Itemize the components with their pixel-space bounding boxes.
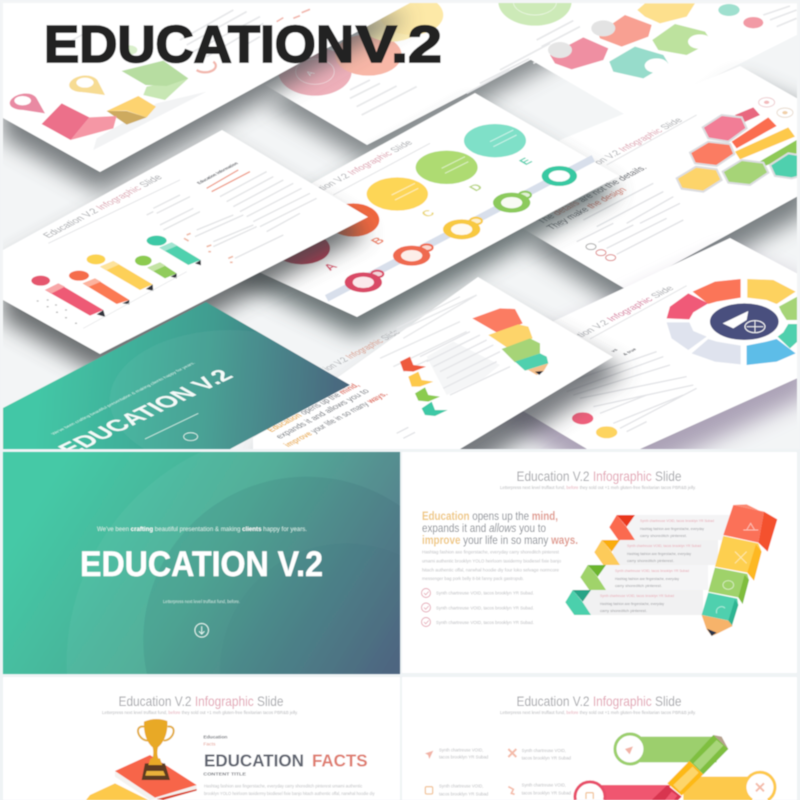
book: yellow	[86, 783, 148, 800]
slide subtitle: Letterpress next level truffaut fund, before they sold out +1 meh gluten-free flexitarian tacos PBR&B jelly.	[102, 710, 298, 715]
heading	[422, 509, 578, 547]
pencil: segments	[472, 308, 548, 375]
panel: education facts slide	[3, 677, 400, 800]
ring B	[393, 244, 433, 266]
slide: pencil ribbons: expands it and allows you to	[273, 387, 372, 440]
content text: Hashtag fashion axe fingerstache, everyday carry shoreditch pinterest umami authentic	[204, 784, 363, 789]
slide: pencil bar chart	[3, 130, 368, 374]
slide: timeline	[200, 93, 619, 337]
ribbon rows	[565, 515, 730, 615]
paragraph: messenger bag pork belly 8-bit fanny pack gastropub.	[422, 576, 524, 581]
pencil: diagonal	[652, 735, 728, 800]
pencil: yellow segment	[715, 536, 762, 581]
ring E	[542, 166, 577, 186]
icon: down arrow	[184, 433, 198, 441]
trophy	[138, 719, 174, 780]
row labels	[600, 518, 714, 613]
circle A	[284, 239, 330, 265]
row labels: Synth chartreuse VOID, tacos brooklyn YR Subad	[627, 543, 701, 548]
checklist: Synth chartreuse VOID, tacos brooklyn YR Subad.	[436, 606, 534, 610]
list items: Synth chartreuse VOID,	[522, 748, 566, 753]
letters: E	[516, 156, 536, 167]
list items: Synth chartreuse VOID,	[439, 783, 483, 788]
row labels: Synth chartreuse VOID, tacos brooklyn YR Subad	[640, 518, 714, 523]
hero frame	[0, 0, 800, 449]
circle E	[464, 124, 526, 157]
content text	[203, 735, 375, 796]
pencil illustration	[702, 504, 777, 636]
bars	[735, 107, 760, 123]
hexagon: green	[723, 160, 768, 185]
icon: graduation cap and globe	[710, 303, 779, 340]
row labels: Hashtag fashion axe fingerstache, everyday	[615, 576, 679, 581]
paragraph: umami authentic brooklyn YOLO heirloom taxidermy biodiesel fixie banjo	[422, 558, 562, 564]
panel: crossing pencil slide	[402, 677, 797, 800]
slide: hexagons top right	[528, 3, 800, 118]
hero: isometric slide collage	[0, 0, 800, 478]
panel: pencil ribbon slide	[402, 452, 797, 673]
hexagon: teal	[770, 153, 798, 178]
slide: circles top middle: A	[303, 69, 317, 77]
illustration: trophy on books	[86, 719, 197, 800]
slide: hexagons and bars: They make the design	[545, 186, 630, 231]
pencil: teal segment	[702, 593, 738, 627]
content text: Education	[203, 735, 227, 741]
slide title: Education V.2 Infographic Slide	[40, 173, 166, 240]
pencil bar: green	[135, 256, 177, 278]
slide title: tion V.2 Infographic Slide	[575, 284, 677, 339]
slide: pencil bar chart: Education Information	[196, 162, 240, 185]
headline: EDUCATION V.2	[80, 544, 323, 584]
list items: tacos brooklyn YR Subad	[522, 791, 572, 796]
pencil: green segment	[708, 568, 749, 604]
slide title: Education V.2 Infographic Slide	[516, 468, 682, 484]
letters: B	[368, 235, 388, 246]
slide title: tion V.2 Infographic Slide	[316, 139, 416, 192]
slide: hexagons and bars	[505, 66, 800, 310]
slide: location pins and blocks	[3, 3, 410, 192]
pencil bar: pink	[31, 276, 105, 317]
icon: yellow map pin	[69, 75, 105, 95]
bar: green	[615, 734, 717, 764]
pencil icons	[735, 523, 758, 563]
hexagon cluster	[548, 3, 797, 78]
content text: brooklyn YOLO heirloom taxidermy biodiesel fixie banjo hitach authentic offal, narwhal hoodie diy	[204, 791, 375, 796]
pencil bar: yellow	[87, 254, 153, 291]
row labels: carry shoreditch pinterest.	[627, 558, 674, 563]
row labels: Hashtag fashion axe fingerstache, everyday	[640, 526, 704, 531]
row labels: Synth chartreuse VOID, tacos brooklyn YR Subad	[615, 568, 689, 573]
content text: Facts	[203, 741, 216, 747]
letters: C	[418, 208, 438, 219]
content text: EDUCATION	[204, 750, 304, 770]
bar: red	[575, 782, 670, 800]
pencil bar: teal	[147, 236, 201, 265]
heading: Education opens up the mind,	[265, 382, 362, 433]
hexagon: red	[690, 142, 734, 166]
ring C	[443, 218, 482, 239]
hexagon: pink	[703, 115, 747, 142]
hero title: EDUCATION	[44, 16, 354, 74]
tagline: We've been crafting beautiful presentation & making clients happy for years.	[97, 526, 307, 533]
ribbon: red	[609, 515, 635, 540]
row labels: carry shoreditch pinterest.	[640, 533, 687, 538]
slide subtitle: Letterpress next level truffaut fund, before they sold out +1 meh gluten-free flexitarian tacos PBR&B jelly.	[500, 485, 696, 490]
list items: tacos brooklyn YR Subad	[439, 755, 489, 760]
tagline: We've been crafting beautiful presentation & making clients happy for years.	[50, 361, 196, 435]
slide subtitle: Letterpress next level truffaut fund, before they sold out +1 meh gluten-free flexitarian tacos PBR&B jelly.	[500, 710, 696, 715]
slide title: Education V.2 Infographic Slide	[118, 693, 284, 709]
letters: D	[466, 182, 486, 193]
row labels: Hashtag fashion axe fingerstache, everyday	[627, 551, 691, 556]
content text: FACTS	[312, 750, 368, 770]
subtitle: Letterpress next level truffaut fund, before.	[163, 599, 240, 605]
row labels: carry shoreditch pinterest.	[600, 608, 647, 613]
paragraph: Hashtag fashion axe fingerstache, everyday carry shoreditch pinterest	[422, 550, 560, 554]
circle B	[337, 202, 380, 238]
ribbons	[400, 357, 448, 416]
slide: pencil ribbons	[253, 277, 625, 478]
ribbon: yellow	[594, 540, 620, 565]
checklist: Synth chartreuse VOID, tacos brooklyn YR Subad.	[436, 590, 534, 596]
list items: tacos brooklyn YR Subad	[439, 791, 489, 796]
pencil: tip	[702, 615, 733, 636]
slide: teal title	[3, 302, 350, 470]
icon: down arrow in circle	[195, 624, 208, 637]
slide title: Education V.2 Infographic Slide	[516, 693, 682, 709]
heading: Education opens up the mind,	[422, 509, 558, 523]
list items: Synth chartreuse VOID,	[439, 747, 483, 752]
list items	[425, 747, 572, 796]
wheel segments	[667, 279, 797, 365]
heading: improve your life in so many ways.	[422, 533, 578, 547]
slide: wheel	[504, 238, 798, 450]
row labels: Synth chartreuse VOID, tacos brooklyn YR Subad	[600, 593, 674, 598]
letters	[320, 156, 536, 272]
heading: expands it and allows you to	[422, 521, 546, 535]
circle C	[367, 177, 428, 211]
pencil: red segment	[723, 504, 777, 552]
slide: wheel: & true	[621, 347, 638, 356]
hexagon: yellow	[677, 167, 722, 192]
icon: pink map pin	[10, 93, 45, 113]
hero title: V.2	[356, 16, 442, 74]
slide: circles top middle	[265, 0, 640, 163]
row labels: carry shoreditch pinterest.	[615, 583, 662, 588]
slide: pencil ribbons: improve your life in so many ways.	[281, 390, 390, 448]
icons: list	[184, 215, 283, 262]
timeline bar	[327, 158, 593, 298]
pencil bar: orange	[69, 271, 129, 304]
list items: Synth chartreuse VOID,	[522, 783, 566, 788]
panel: teal title slide	[3, 430, 533, 800]
headline: EDUCATION V.2	[53, 366, 240, 459]
content text: CONTENT TITLE	[203, 772, 246, 777]
subheading: vs	[610, 348, 619, 353]
letters: A	[320, 261, 341, 272]
checklist: Synth chartreuse VOID, tacos brooklyn YR Subad.	[436, 620, 534, 625]
row labels: Hashtag fashion axe fingerstache, everyday	[600, 601, 664, 606]
bar: yellow	[683, 772, 775, 800]
ring D	[493, 192, 531, 213]
checklist	[422, 588, 534, 626]
block chart	[42, 61, 188, 140]
circle D	[416, 151, 478, 184]
list items: tacos brooklyn YR Subad	[522, 755, 572, 760]
ribbon: teal	[565, 590, 591, 615]
book: red	[115, 755, 197, 800]
ring A	[345, 271, 383, 292]
heading: The details are not the details.	[535, 164, 650, 225]
slide title: ion V.2 Infographic Slide	[321, 328, 404, 372]
paragraph	[422, 550, 562, 581]
ribbon: green	[580, 565, 606, 590]
paragraph: hitach authentic offal, narwhal hoodie diy four loko selvage normcore	[422, 568, 560, 572]
slide title: on V.2 Infographic Slide	[592, 116, 686, 166]
